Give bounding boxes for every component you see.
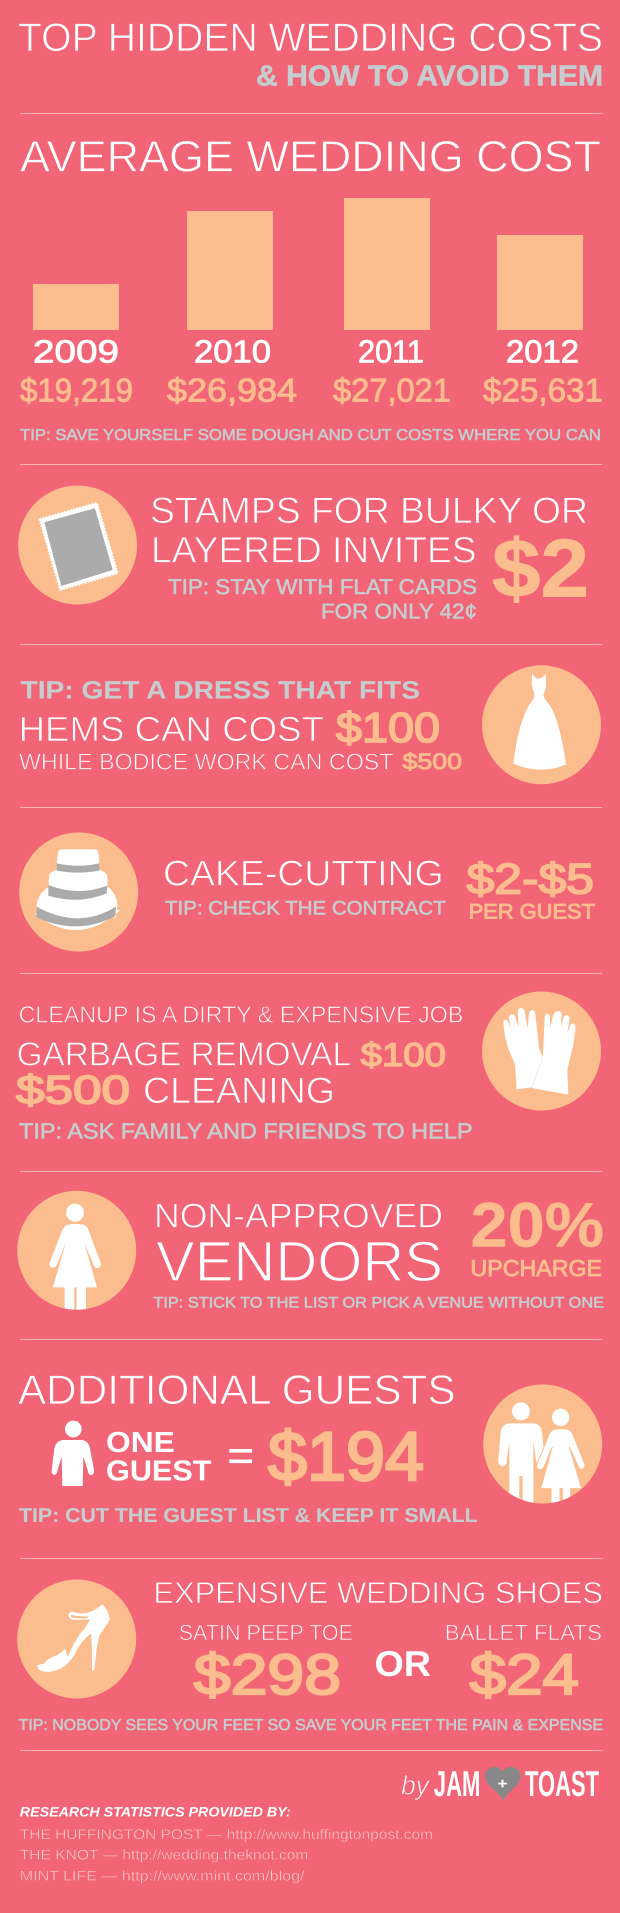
bodice cost: $500 [402, 749, 462, 774]
heading: cake-cutting: CAKE-CUTTING [163, 852, 444, 894]
bar chart: 2012 [506, 334, 579, 370]
tip: dress that fits: TIP: GET A DRESS THAT FITS [20, 676, 420, 704]
icon: cake [19, 832, 138, 952]
title [18, 16, 603, 93]
hems cost: HEMS CAN COST [19, 710, 324, 749]
panel: wedding shoes [17, 1577, 603, 1734]
icon: man [52, 1421, 94, 1486]
garbage removal cost: $100 [361, 1036, 446, 1073]
heading: non-approved vendors: NON-APPROVED [154, 1198, 443, 1236]
comparison: peep toe vs ballet flats: OR [374, 1643, 431, 1684]
bar chart: 2009 [33, 334, 119, 370]
icon: heart [485, 1767, 521, 1801]
comparison: peep toe vs ballet flats [179, 1620, 602, 1707]
heading: average wedding cost: AVERAGE WEDDING COST [20, 132, 601, 181]
research sources: RESEARCH STATISTICS PROVIDED BY: [20, 1805, 291, 1820]
price: $194: $194 [268, 1418, 424, 1495]
tip: contract: TIP: CHECK THE CONTRACT [165, 898, 446, 920]
panel: non-approved vendors [17, 1190, 604, 1312]
one guest [106, 1427, 212, 1487]
bar chart: $26,984 [167, 372, 297, 409]
tip: flat cards: TIP: STAY WITH FLAT CARDS [168, 575, 477, 599]
bar chart: $25,631 [483, 372, 603, 409]
comparison: peep toe vs ballet flats: SATIN PEEP TOE [179, 1620, 353, 1645]
heading: non-approved vendors [154, 1198, 443, 1294]
panel: stamps: LAYERED INVITES [151, 530, 476, 571]
research sources: THE KNOT — http://wedding.theknot.com [20, 1846, 308, 1862]
panel: additional guests [18, 1366, 602, 1527]
icon: woman [17, 1191, 136, 1312]
heading: additional guests: ADDITIONAL GUESTS [18, 1366, 456, 1413]
bar chart: 2011 [358, 334, 424, 370]
equals sign [229, 1449, 252, 1463]
tip: family and friends: TIP: ASK FAMILY AND FRIENDS TO HELP [19, 1119, 472, 1144]
subheading: cleanup: CLEANUP IS A DIRTY & EXPENSIVE JOB [19, 1002, 463, 1028]
icon: couple [483, 1384, 602, 1507]
heading: non-approved vendors: VENDORS [156, 1230, 443, 1294]
cleaning cost: CLEANING [143, 1070, 335, 1111]
comparison: peep toe vs ballet flats: $298 [194, 1643, 341, 1707]
icon: stamp [18, 486, 137, 604]
panel: cleanup [16, 992, 601, 1144]
bodice cost: WHILE BODICE WORK CAN COST [19, 748, 394, 774]
logo: by jam + toast: by [401, 1770, 430, 1800]
research sources [20, 1805, 433, 1884]
bar chart [20, 198, 603, 409]
tip: cut costs: TIP: SAVE YOURSELF SOME DOUGH AND CUT COSTS WHERE YOU CAN [20, 427, 601, 444]
comparison: peep toe vs ballet flats: BALLET FLATS [445, 1620, 602, 1645]
panel: cake cutting [19, 832, 595, 952]
bar chart: $27,021 [333, 372, 451, 409]
research sources: THE HUFFINGTON POST — http://www.huffingtonpost.com [20, 1826, 433, 1842]
hems cost: $100 [336, 704, 440, 751]
title: & HOW TO AVOID THEM [256, 61, 603, 93]
logo: by jam + toast [401, 1763, 599, 1804]
logo: by jam + toast: + [498, 1776, 508, 1792]
cleaning cost [16, 1068, 335, 1112]
price: $2: $2 [492, 524, 589, 614]
tip: flat cards: FOR ONLY 42¢ [321, 600, 477, 624]
tip: stick to the list: TIP: STICK TO THE LIST OR PICK A VENUE WITHOUT ONE [153, 1295, 604, 1312]
icon: shoe [17, 1580, 136, 1698]
heading: stamps: STAMPS FOR BULKY OR [150, 490, 588, 531]
cleaning cost: $500 [16, 1068, 130, 1112]
comparison: peep toe vs ballet flats: $24 [470, 1643, 579, 1707]
panel: stamps [18, 486, 589, 624]
one guest: ONE [106, 1427, 175, 1459]
one guest: GUEST [106, 1455, 212, 1487]
logo: by jam + toast: JAM [434, 1763, 480, 1804]
heading: expensive wedding shoes: EXPENSIVE WEDDING SHOES [153, 1577, 603, 1610]
tip: flat cards [168, 575, 477, 624]
price: $2-$5 per guest: $2-$5 [467, 855, 594, 903]
price: 20% upcharge: 20% [470, 1190, 604, 1260]
garbage removal cost: GARBAGE REMOVAL [17, 1036, 351, 1073]
price: $2-$5 per guest [467, 855, 595, 924]
title: TOP HIDDEN WEDDING COSTS [18, 16, 603, 60]
hems cost [19, 704, 440, 751]
panel: dress [19, 665, 601, 784]
bar chart: $19,219 [20, 372, 133, 409]
tip: save your feet: TIP: NOBODY SEES YOUR FEET SO SAVE YOUR FEET THE PAIN & EXPENSE [19, 1717, 603, 1734]
bar chart: 2010 [194, 334, 271, 370]
price: 20% upcharge: UPCHARGE [470, 1255, 602, 1281]
panel: average wedding cost [20, 132, 603, 444]
price: $2-$5 per guest: PER GUEST [469, 901, 595, 924]
icon: dress [482, 665, 601, 784]
tip: guest list: TIP: CUT THE GUEST LIST & KEEP IT SMALL [19, 1505, 478, 1527]
icon: gloves [482, 992, 601, 1110]
research sources: MINT LIFE — http://www.mint.com/blog/ [20, 1868, 305, 1884]
